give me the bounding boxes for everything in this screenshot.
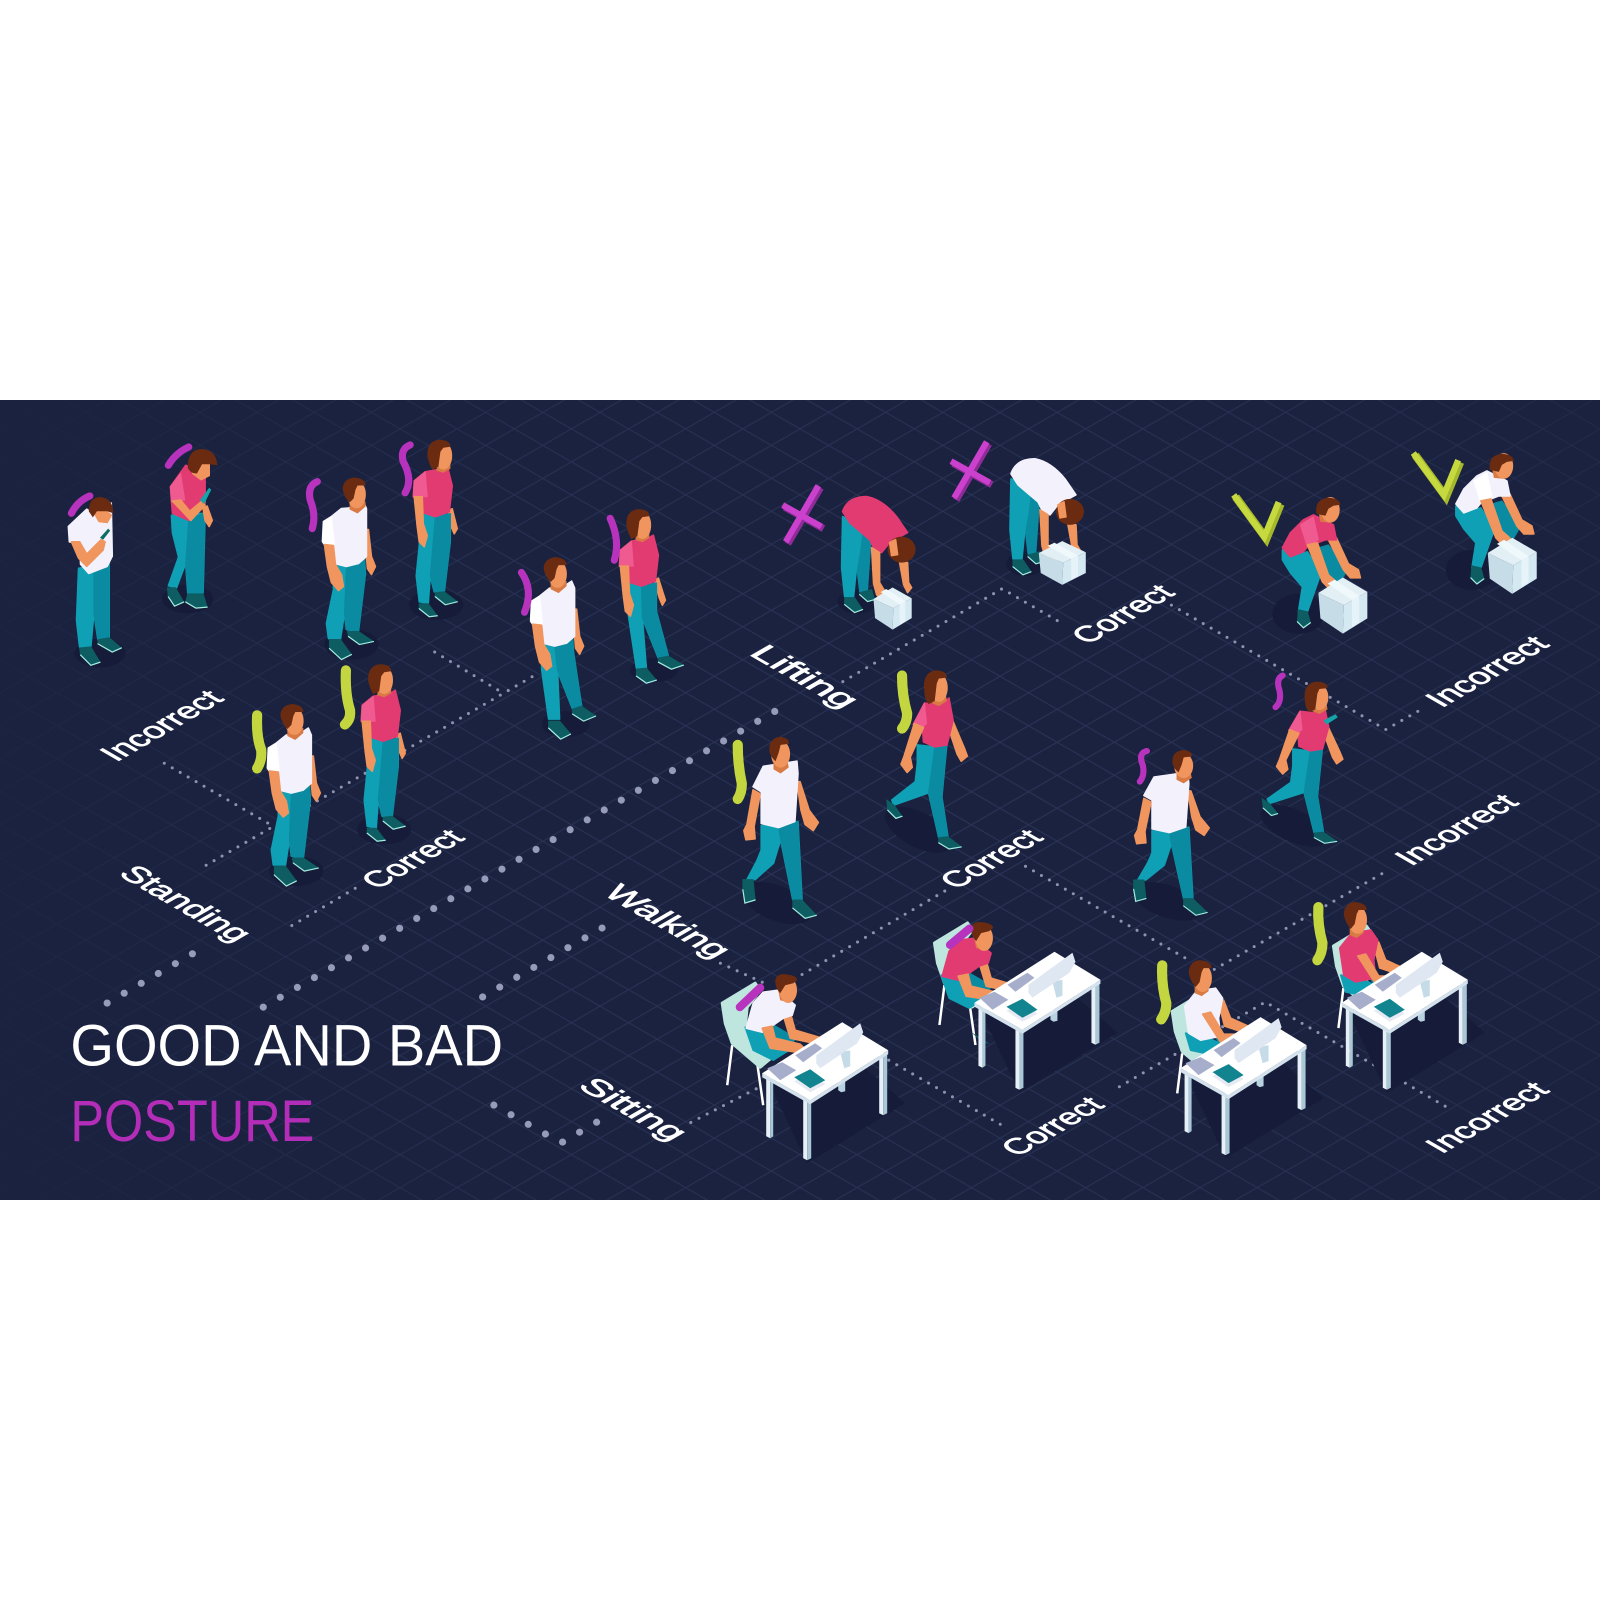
figure: man lifting, incorrect [951, 442, 1086, 585]
title [70, 1013, 503, 1154]
label: Correct (sitting): Correct [992, 1092, 1112, 1161]
label: Correct (walking): Correct [931, 824, 1051, 893]
figure: man sitting at desk, incorrect [722, 974, 905, 1163]
figure: woman slouching, incorrect [402, 440, 463, 620]
label: Incorrect (walking): Incorrect [1386, 789, 1526, 870]
figure: man lifting, correct [1413, 453, 1537, 594]
label: Incorrect (sitting): Incorrect [1417, 1077, 1557, 1158]
figure: man standing, correct [257, 704, 323, 886]
figure: woman lifting, incorrect [783, 486, 916, 630]
figure: woman sitting at desk, incorrect [934, 922, 1117, 1093]
figure: man slouching, incorrect [309, 478, 378, 660]
figure: man sitting at desk, correct [1161, 960, 1324, 1158]
infographic canvas [0, 400, 1600, 1200]
label: Walking: Walking [596, 879, 740, 963]
figure: woman walking with phone, incorrect [1253, 676, 1343, 855]
label: Incorrect (standing): Incorrect [91, 685, 231, 766]
dotted connector lines [107, 589, 1452, 1143]
title: POSTURE [70, 1089, 314, 1154]
figure: woman standing, phone, incorrect [162, 447, 217, 613]
figure: woman standing, correct [345, 664, 411, 844]
label: Standing: Standing [111, 860, 261, 946]
figure: woman standing, incorrect [610, 509, 683, 683]
figure: woman lifting, correct [1234, 495, 1367, 634]
label: Sitting: Sitting [570, 1072, 697, 1145]
label: Incorrect (lifting): Incorrect [1417, 631, 1557, 712]
label: Lifting: Lifting [742, 640, 869, 713]
title: GOOD AND BAD [70, 1013, 503, 1078]
figure: man walking, incorrect [1127, 750, 1209, 929]
figure: woman sitting at desk, correct [1317, 902, 1485, 1093]
dark panel background [0, 400, 1600, 1200]
label: Correct (lifting): Correct [1063, 579, 1182, 648]
figure: man standing, phone, incorrect [68, 496, 126, 667]
figure: man standing, incorrect [521, 557, 596, 739]
figure: woman walking, correct [878, 670, 967, 862]
label: Correct (standing): Correct [352, 824, 472, 893]
figure: man walking, correct [736, 737, 818, 933]
